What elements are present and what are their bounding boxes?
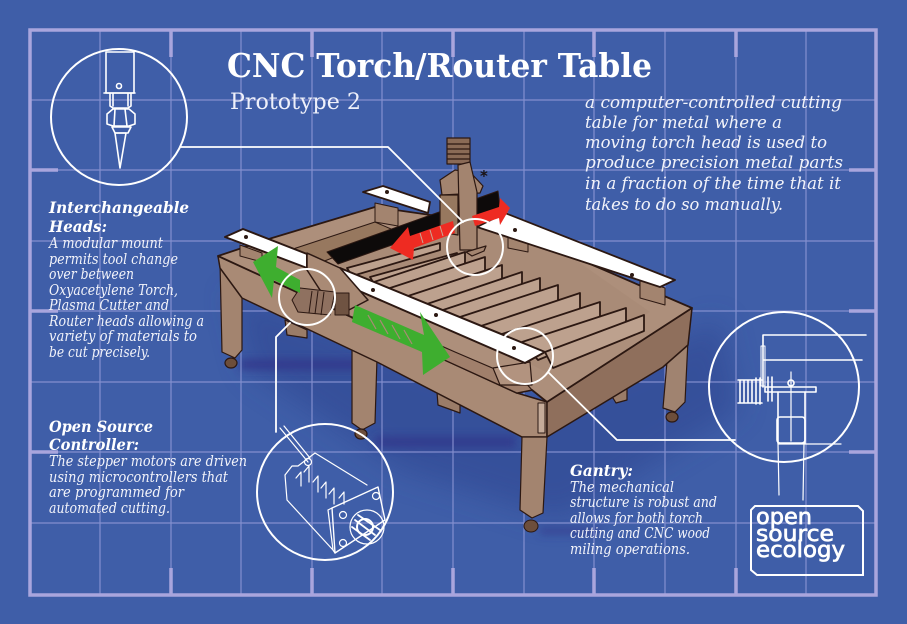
callout lines [181, 147, 735, 440]
logo: open source ecology: open [756, 505, 812, 530]
description [585, 93, 843, 215]
front white board [225, 229, 545, 363]
table shadow [230, 290, 740, 535]
logo: open source ecology: ecology [756, 538, 845, 563]
torch column [440, 138, 486, 256]
title: CNC Torch/Router Table [227, 46, 652, 85]
table body [218, 256, 547, 437]
description: a computer-controlled cutting [585, 93, 842, 113]
bed interior [338, 207, 650, 372]
text block: open source controller [49, 417, 247, 517]
text block: interchangeable heads: Heads: [48, 217, 107, 236]
text block: gantry: structure is robust and [570, 495, 717, 511]
description: takes to do so manually. [585, 195, 783, 215]
slats [347, 243, 644, 368]
red arrow: right [472, 198, 510, 226]
table legs [220, 262, 688, 439]
text block: interchangeable heads: variety of materials to [49, 329, 197, 345]
text block: interchangeable heads: Plasma Cutter and [48, 298, 169, 314]
stepper motor [292, 288, 349, 315]
red arrow: left [390, 221, 455, 260]
text block: interchangeable heads [47, 198, 204, 361]
text block: gantry: miling operations. [570, 542, 690, 558]
asterisk mark: * [480, 167, 488, 185]
text block: gantry: Gantry: [570, 461, 633, 480]
text block: open source controller: are programmed for [49, 485, 185, 501]
detail circle: stepper motor [257, 424, 393, 560]
text block: interchangeable heads: A modular mount [47, 236, 163, 252]
text block: interchangeable heads: Oxyacetylene Torch, [49, 283, 178, 299]
back rail [290, 222, 398, 262]
green arrow: front [352, 305, 450, 375]
logo: open source ecology [751, 505, 863, 575]
gantry side plate [307, 253, 368, 312]
text block: gantry: allows for both torch [570, 511, 703, 527]
small highlight circles [279, 219, 553, 384]
text block: interchangeable heads: over between [49, 267, 134, 283]
subtitle: Prototype 2 [230, 90, 361, 115]
text block: gantry: cutting and CNC wood [570, 526, 710, 542]
description: produce precision metal parts [585, 153, 843, 173]
text block: gantry: The mechanical [570, 480, 674, 496]
logo: open source ecology: source [756, 522, 834, 547]
detail circle: gantry section [709, 312, 866, 500]
bolt holes [244, 190, 634, 350]
description: table for metal where a [585, 113, 782, 133]
text block: open source controller: Open Source [49, 417, 153, 436]
green arrow: left [253, 246, 300, 298]
text block: interchangeable heads: Router heads allowing a [48, 314, 204, 330]
text block: open source controller: Controller: [49, 435, 139, 454]
text block: open source controller: automated cutting. [49, 501, 170, 517]
black beam [327, 191, 500, 264]
text block: interchangeable heads: permits tool change [49, 252, 178, 268]
description: moving torch head is used to [585, 133, 827, 153]
detail circle: torch head [51, 49, 187, 185]
under-board channel [352, 310, 532, 393]
text block: interchangeable heads: Interchangeable [48, 198, 189, 217]
text block: open source controller: The stepper motors are driven [49, 454, 247, 470]
CNC table illustration [218, 138, 692, 532]
front corner leg [520, 403, 547, 532]
text block: open source controller: using microcontrollers that [49, 470, 228, 486]
text block: interchangeable heads: be cut precisely. [49, 345, 150, 361]
back white board [363, 186, 675, 287]
text block: gantry [570, 461, 717, 558]
rail brackets [240, 203, 665, 305]
table top surface [218, 207, 692, 402]
description: in a fraction of the time that it [585, 174, 841, 194]
